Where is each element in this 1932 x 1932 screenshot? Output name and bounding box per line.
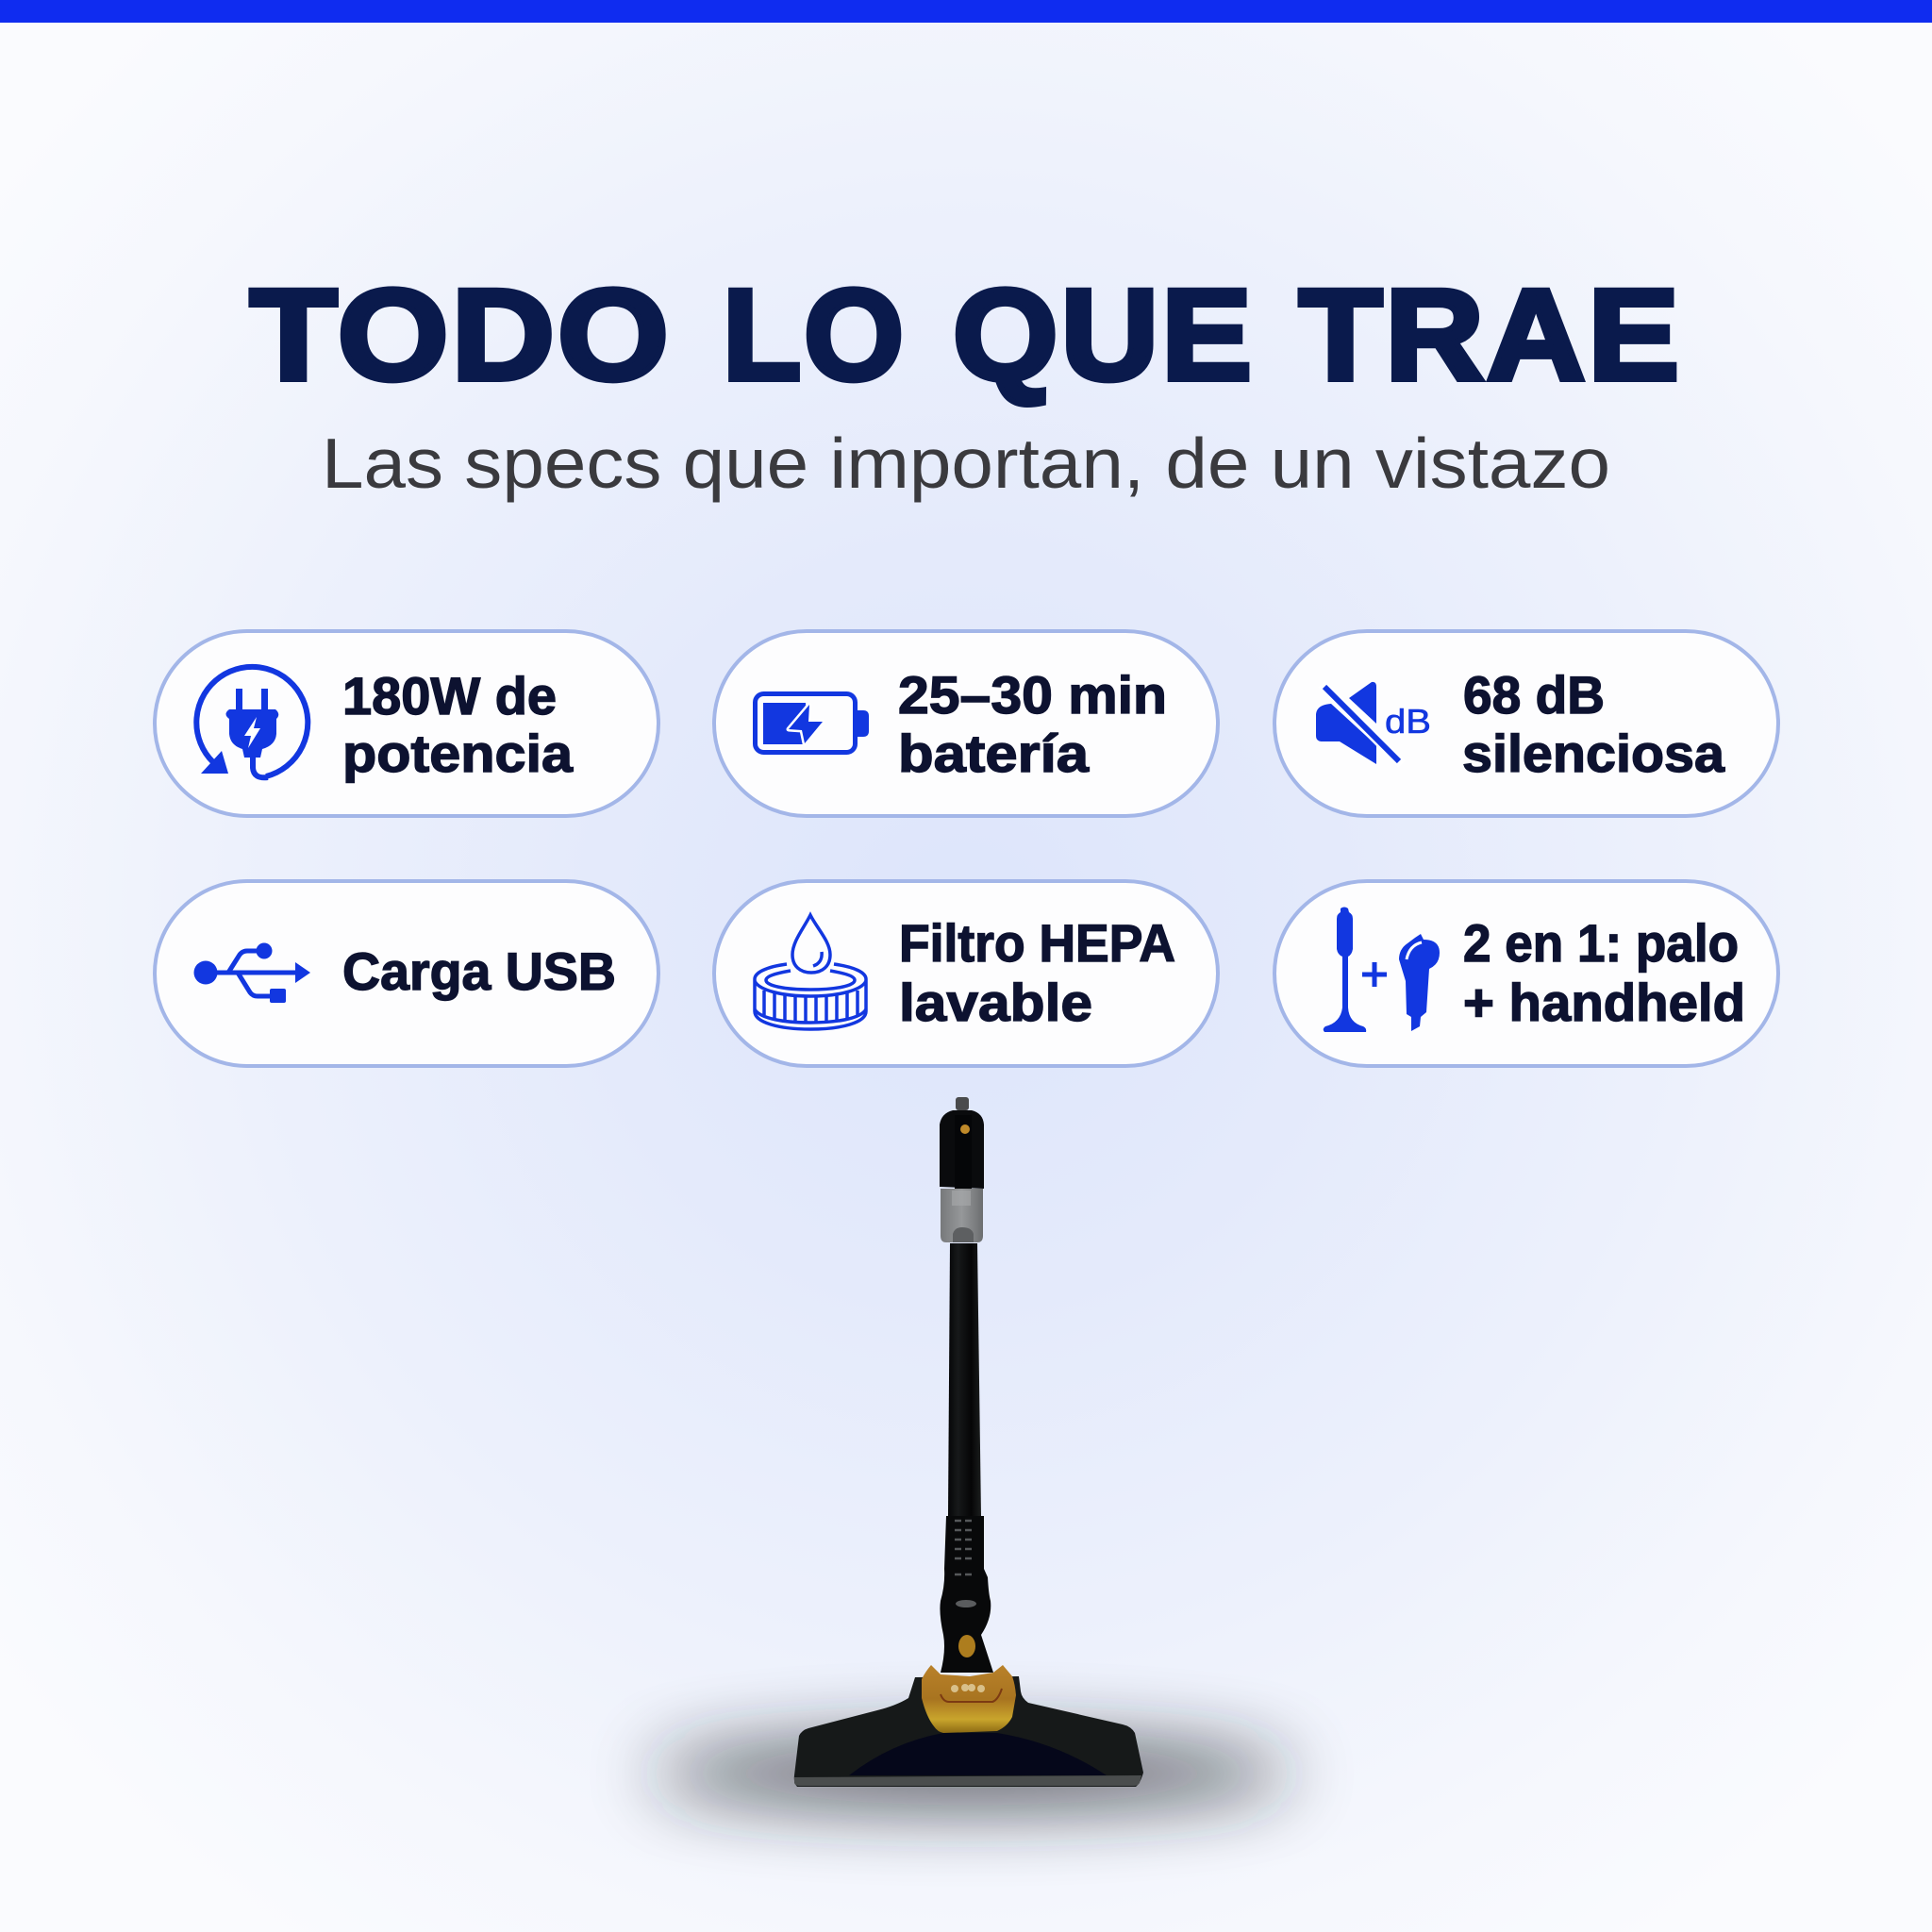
text: 25-30 min bateria xyxy=(898,665,1167,783)
flex joint xyxy=(940,1516,993,1673)
subtitle: Las specs que importan, de un vistazo xyxy=(322,424,1610,503)
text: 68 dB silenciosa: silenciosa xyxy=(1462,724,1725,783)
text: 25-30 min bateria: 25–30 min xyxy=(898,665,1167,724)
top blue bar xyxy=(0,0,1932,23)
pill: 25-30 min bateria xyxy=(714,631,1218,816)
title: TODO xyxy=(250,263,672,408)
icon: USB symbol xyxy=(194,943,310,1003)
nozzle front arc xyxy=(849,1733,1107,1775)
text: Filtro HEPA lavable: lavable xyxy=(899,973,1092,1032)
vacuum head top unit xyxy=(940,1097,984,1189)
product: stick vacuum xyxy=(794,1097,1143,1787)
pill: Filtro HEPA lavable xyxy=(714,881,1218,1066)
text: Filtro HEPA lavable: Filtro HEPA xyxy=(899,913,1175,973)
gold pivot button xyxy=(958,1635,975,1657)
pill: 180W de potencia xyxy=(155,631,658,816)
icon: battery with bolt xyxy=(755,694,869,753)
title: QUE xyxy=(953,263,1255,408)
pill: Carga USB xyxy=(155,881,658,1066)
text: 2 en 1 palo + handheld: + handheld xyxy=(1463,973,1745,1032)
icon: plug with circular arrow xyxy=(196,667,308,777)
text: 68 dB silenciosa: 68 dB xyxy=(1463,665,1605,724)
title xyxy=(250,263,1682,408)
text: 25-30 min bateria: batería xyxy=(898,724,1090,783)
floor shadow xyxy=(651,1740,1292,1807)
text: Carga USB: Carga USB xyxy=(342,941,616,1001)
text: 180W de potencia xyxy=(342,666,574,783)
title: TRAE xyxy=(1299,263,1682,408)
text: 180W de potencia: potencia xyxy=(342,724,574,783)
floor nozzle body xyxy=(794,1676,1143,1787)
pill: 68 dB silenciosa xyxy=(1274,631,1778,816)
nozzle bottom strip xyxy=(794,1775,1141,1786)
handle tube xyxy=(948,1243,981,1516)
icon: stick vacuum plus handheld xyxy=(1324,908,1440,1032)
transparent dust bin xyxy=(941,1189,983,1242)
pill: 2 en 1 palo + handheld xyxy=(1274,881,1778,1066)
text: 2 en 1 palo + handheld xyxy=(1463,913,1745,1032)
icon: washable filter with water drop xyxy=(755,915,866,1029)
icon: muted speaker with dB: dB xyxy=(1385,702,1431,741)
icon: muted speaker with dB xyxy=(1316,682,1431,764)
title: LO xyxy=(723,263,907,408)
text: 180W de potencia: 180W de xyxy=(342,666,557,725)
text: Filtro HEPA lavable xyxy=(899,913,1175,1032)
text: 2 en 1 palo + handheld: 2 en 1: palo xyxy=(1463,913,1739,973)
gold housing xyxy=(922,1665,1016,1733)
text: 68 dB silenciosa xyxy=(1462,665,1725,783)
